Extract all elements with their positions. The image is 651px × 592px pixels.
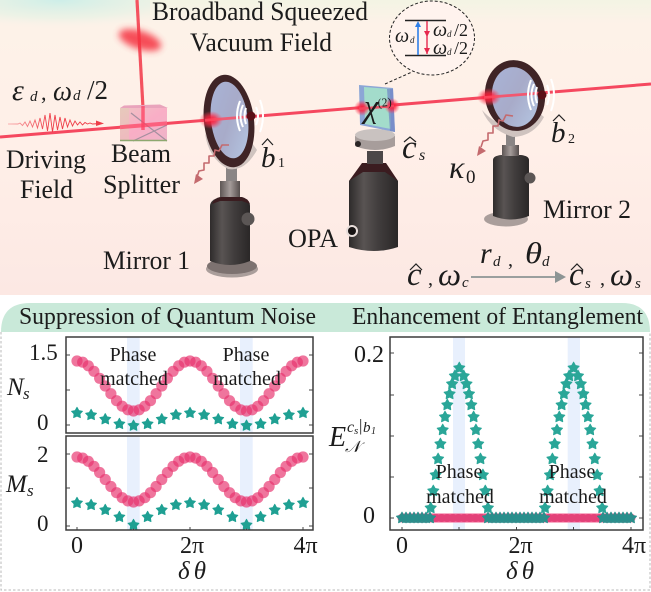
energy level bubble: ω bbox=[433, 19, 447, 41]
label: b2 operator: 2 bbox=[568, 132, 575, 147]
label: driving amplitude: /2 bbox=[87, 75, 108, 105]
OPA body bbox=[349, 163, 398, 251]
energy level bubble: ω bbox=[395, 25, 409, 47]
entanglement teal series bbox=[396, 362, 637, 523]
left chart axis labels: 0 bbox=[37, 511, 48, 536]
transformation relation: θ bbox=[525, 237, 542, 270]
left chart axis labels: 4π bbox=[293, 533, 318, 559]
left chart axis labels: s bbox=[27, 481, 34, 500]
Ns phase matched labels bbox=[100, 344, 281, 390]
label: driving amplitude: d bbox=[30, 89, 38, 105]
OPA nonlinear crystal: (2) bbox=[377, 95, 392, 110]
Ns teal series bbox=[71, 407, 309, 430]
label: b1 operator bbox=[261, 139, 285, 174]
left chart axis labels: 2 bbox=[37, 442, 48, 467]
Ms teal series bbox=[71, 497, 309, 530]
label: driving field: Driving bbox=[6, 145, 86, 174]
label: driving amplitude bbox=[12, 74, 108, 107]
right chart axis labels: 0 bbox=[396, 533, 408, 559]
energy level bubble bbox=[385, 1, 474, 84]
chart: Ns bbox=[66, 337, 313, 433]
mirror 2 body bbox=[493, 155, 529, 220]
Ns phase matched labels: matched bbox=[100, 368, 168, 390]
beam glow on mirrors bbox=[199, 88, 541, 129]
right chart axis labels bbox=[328, 342, 646, 585]
label: cs operator: c bbox=[402, 130, 417, 166]
mirror 2 bbox=[480, 56, 550, 227]
entanglement phase matched labels: matched bbox=[426, 486, 494, 508]
Ms pink series bbox=[71, 451, 309, 508]
OPA mount bbox=[346, 129, 398, 251]
Ns phase matched labels: matched bbox=[213, 368, 281, 390]
label: OPA: OPA bbox=[288, 224, 338, 253]
Ns phase matched labels: Phase bbox=[110, 344, 156, 366]
transformation relation: , bbox=[428, 268, 433, 290]
right chart axis labels: 0 bbox=[363, 503, 375, 529]
right chart axis labels: 1 bbox=[371, 426, 376, 437]
entanglement phase matched labels bbox=[426, 461, 607, 508]
mirror 2 lens bbox=[488, 64, 542, 130]
left chart axis labels: 1.5 bbox=[29, 340, 58, 365]
entanglement phase matched labels: Phase bbox=[549, 461, 595, 483]
transformation relation: ω bbox=[610, 256, 633, 292]
transformation relation: c bbox=[462, 275, 469, 291]
transformation relation: s bbox=[635, 276, 641, 292]
transformation relation: d bbox=[542, 254, 550, 270]
OPA nonlinear crystal: χ bbox=[361, 89, 380, 125]
label: driving field bbox=[6, 145, 86, 204]
label: broadband squeezed vacuum field: Vacuum Field bbox=[190, 28, 332, 57]
entanglement pink series bbox=[402, 514, 631, 522]
vibration ripple mirror 1 bbox=[237, 100, 263, 132]
label: driving field: Field bbox=[20, 175, 73, 204]
left chart axis labels: M bbox=[5, 471, 28, 498]
label: driving amplitude: d bbox=[73, 88, 81, 104]
Ns phase matched labels: Phase bbox=[223, 344, 269, 366]
right chart axis labels: 4π bbox=[622, 533, 646, 559]
right chart axis labels: s bbox=[354, 425, 358, 437]
arrow: transformation bbox=[471, 271, 566, 283]
entanglement phase matched labels: Phase bbox=[436, 461, 482, 483]
label: kappa0: κ bbox=[449, 149, 465, 185]
label: beam splitter: Splitter bbox=[103, 170, 180, 199]
transformation relation: r bbox=[480, 237, 492, 270]
transformation relation: c bbox=[569, 257, 584, 293]
energy level bubble: d bbox=[447, 47, 452, 57]
mirror 2 bracket bbox=[482, 110, 544, 137]
label: mirror 1: Mirror 1 bbox=[103, 246, 190, 275]
label: broadband squeezed vacuum field bbox=[152, 0, 368, 57]
label: kappa0: 0 bbox=[466, 167, 476, 188]
mirror 1 body bbox=[210, 197, 250, 265]
mirror 2 base bbox=[484, 212, 528, 226]
energy level bubble: /2 bbox=[454, 20, 468, 40]
energy level bubble: d bbox=[447, 29, 452, 39]
label: driving amplitude: , bbox=[41, 80, 46, 105]
label: kappa0 bbox=[449, 149, 476, 188]
heading: suppression of quantum noise: Suppression of Quantum Noise bbox=[19, 304, 316, 330]
Ns pink series bbox=[71, 355, 309, 417]
right chart axis labels: δθ bbox=[506, 558, 534, 585]
heading: enhancement of entanglement: Enhancement of Entanglement bbox=[352, 304, 643, 330]
transformation relation: ω bbox=[438, 256, 461, 292]
right chart axis labels: 0.2 bbox=[354, 342, 384, 368]
squeezed vacuum blob bbox=[116, 25, 164, 55]
label: beam splitter bbox=[103, 139, 180, 199]
right chart axis labels: b bbox=[363, 420, 371, 436]
label: beam splitter: Beam bbox=[111, 139, 171, 168]
right chart axis labels: E bbox=[328, 422, 346, 453]
header band bbox=[1, 303, 650, 332]
left chart axis labels: 0 bbox=[37, 410, 48, 435]
mirror 1 ring bbox=[199, 72, 259, 170]
driving field pulse bbox=[8, 113, 104, 132]
label: cs operator bbox=[402, 130, 425, 166]
chart: Ms bbox=[66, 436, 313, 530]
mirror 2 ring bbox=[480, 56, 550, 135]
OPA side hole bbox=[346, 225, 358, 237]
label: mirror 2: Mirror 2 bbox=[543, 195, 631, 224]
label: driving amplitude: ω bbox=[53, 76, 72, 107]
OPA nonlinear crystal bbox=[354, 85, 400, 132]
right chart axis labels: 2π bbox=[508, 533, 533, 559]
left chart axis labels: s bbox=[23, 384, 30, 403]
label: b2 operator: b bbox=[551, 117, 566, 149]
energy level bubble: d bbox=[410, 35, 415, 45]
vertical squeezed vacuum beam bbox=[137, 0, 143, 108]
label: driving amplitude: ε bbox=[12, 74, 24, 107]
zero baseline stars bbox=[396, 512, 637, 523]
left chart axis labels: 0 bbox=[71, 533, 83, 559]
decay arrow mirror 2 bbox=[477, 115, 513, 156]
entanglement phase matched labels: matched bbox=[539, 486, 607, 508]
transformation relation bbox=[407, 237, 641, 293]
chart: entanglement bbox=[390, 337, 643, 530]
beam splitter cube bbox=[120, 104, 168, 141]
label: b1 operator: 1 bbox=[278, 156, 285, 171]
decay arrow mirror 1 bbox=[194, 145, 229, 184]
label: b2 operator bbox=[551, 115, 575, 149]
transformation relation: d bbox=[493, 254, 501, 270]
right chart axis labels: c bbox=[347, 419, 354, 436]
vibration ripple mirror 2 bbox=[528, 79, 554, 111]
energy level bubble: ω bbox=[433, 37, 447, 59]
transformation relation: c bbox=[407, 257, 422, 293]
mirror 1 lens bbox=[206, 80, 253, 160]
illustration background bbox=[0, 0, 651, 295]
left chart axis labels: δθ bbox=[178, 558, 206, 585]
left chart axis labels: N bbox=[6, 374, 25, 401]
mirror 1 bracket bbox=[205, 133, 257, 169]
main horizontal laser beam bbox=[0, 84, 651, 137]
right chart axis labels: | bbox=[359, 416, 362, 435]
label: b1 operator: b bbox=[261, 142, 276, 174]
transformation relation: , bbox=[600, 268, 605, 290]
left chart axis labels: 2π bbox=[180, 533, 204, 559]
left chart axis labels bbox=[5, 340, 318, 585]
transformation relation: s bbox=[585, 276, 591, 292]
right chart axis labels: 𝒩 bbox=[345, 439, 365, 456]
mirror 1 base bbox=[206, 260, 258, 278]
energy level bubble: /2 bbox=[454, 38, 468, 58]
mirror 1 bbox=[199, 72, 259, 278]
transformation relation: , bbox=[508, 249, 513, 271]
label: cs operator: s bbox=[419, 147, 425, 164]
